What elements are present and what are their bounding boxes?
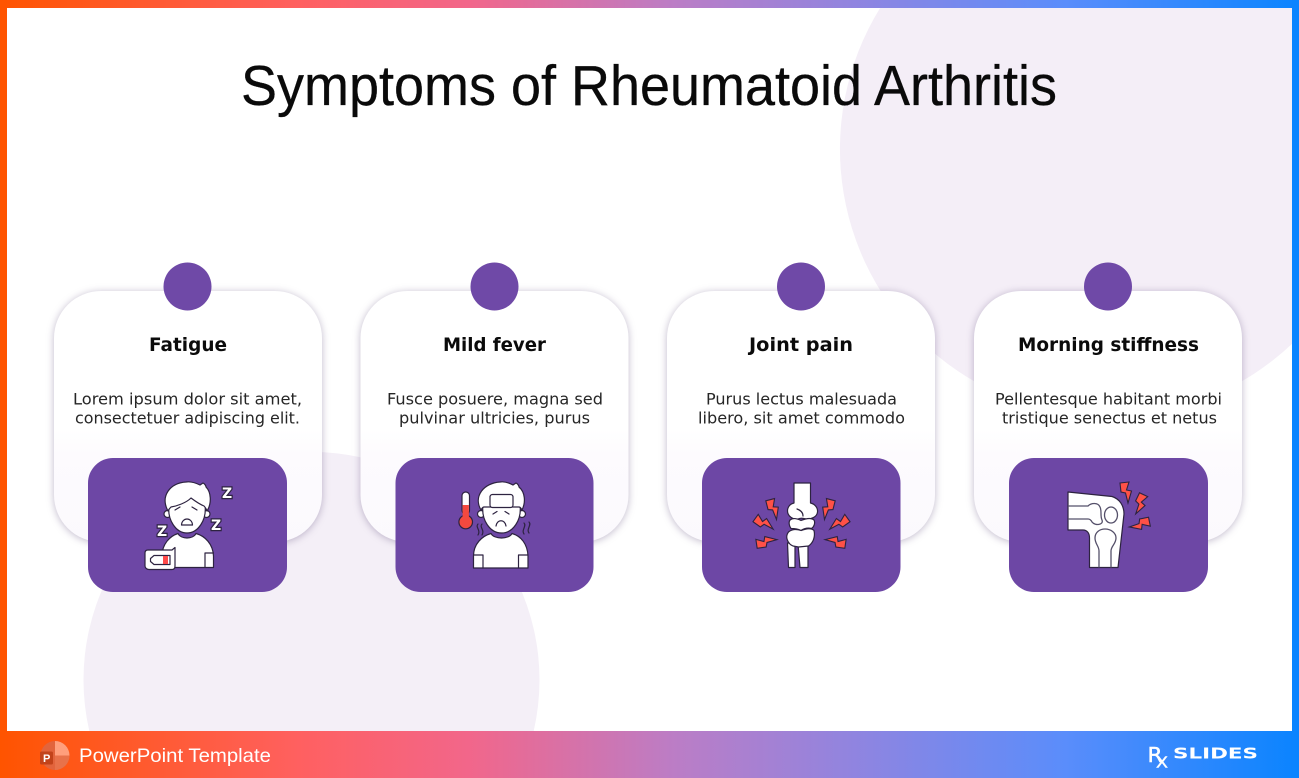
icon tile — [88, 458, 287, 592]
footer: RX Slides logo: SLIDES — [1173, 744, 1258, 762]
panel: morning stiffness — [974, 262, 1242, 592]
heading: Joint pain — [747, 334, 853, 356]
icon: sleeping tired person with low battery — [145, 482, 232, 570]
background circle: bottom left — [84, 452, 540, 731]
card background — [667, 291, 935, 542]
marker dot — [777, 262, 825, 310]
panel: fatigue — [54, 262, 322, 592]
description — [698, 390, 905, 428]
card background — [54, 291, 322, 542]
description: libero, sit amet commodo — [698, 408, 905, 428]
description: consectetuer adipiscing elit. — [75, 408, 300, 428]
icon: sleeping tired person with low battery: Z — [157, 524, 167, 540]
marker dot — [1084, 262, 1132, 310]
icon: sleeping tired person with low battery: Z — [211, 518, 221, 534]
description: Purus lectus malesuada — [706, 390, 897, 408]
description: pulvinar ultricies, purus — [399, 408, 590, 428]
description: tristique senectus et netus — [1002, 408, 1217, 428]
icon tile — [702, 458, 900, 592]
icon tile — [1009, 458, 1208, 592]
footer: label: PowerPoint Template — [79, 745, 271, 767]
card background — [360, 291, 628, 542]
panel: joint pain — [667, 262, 935, 592]
card background — [974, 291, 1242, 542]
footer: PowerPoint icon: P — [43, 753, 50, 765]
footer: PowerPoint icon — [40, 741, 70, 770]
footer: RX Slides logo: X — [1156, 754, 1168, 772]
description: Pellentesque habitant morbi — [995, 390, 1222, 408]
heading: Fatigue — [149, 334, 227, 356]
icon: bent knee with pain bolts — [1068, 482, 1151, 568]
background circle: top right — [840, 8, 1292, 417]
description: Fusce posuere, magna sed — [387, 390, 603, 408]
description — [995, 390, 1222, 428]
footer: RX Slides logo: R — [1148, 743, 1163, 767]
marker dot — [470, 262, 518, 310]
icon: person with fever and thermometer — [459, 482, 530, 568]
title: Symptoms of Rheumatoid Arthritis — [241, 54, 1057, 118]
description: Lorem ipsum dolor sit amet, — [73, 390, 302, 408]
icon: sleeping tired person with low battery: Z — [222, 486, 232, 502]
icon tile — [396, 458, 594, 592]
heading: Mild fever — [443, 334, 547, 356]
marker dot — [164, 262, 212, 310]
icon: painful knee joint — [752, 483, 851, 568]
description — [387, 390, 603, 428]
description — [73, 390, 302, 428]
footer: RX Slides logo — [1148, 743, 1258, 772]
heading: Morning stiffness — [1018, 334, 1199, 356]
panel: mild fever — [360, 262, 628, 592]
